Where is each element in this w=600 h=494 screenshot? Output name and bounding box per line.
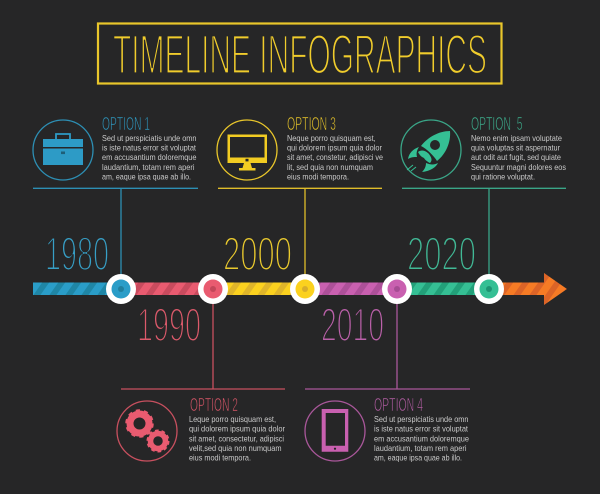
year 1990: 1990: [137, 298, 201, 351]
node 1990: [198, 274, 228, 304]
year 2020: 2020: [407, 227, 476, 280]
option 5 text: OPTION 5: [471, 113, 522, 134]
option 4 text: am, eaque ipsa quae ab illo.: [374, 453, 462, 463]
option 5 text: quia voluptas sit aspernatur: [471, 143, 560, 153]
year 2000: 2000: [223, 227, 292, 280]
option 3 text: eius modi tempora.: [287, 171, 349, 181]
node 2000: [290, 274, 320, 304]
icon: tablet: [305, 401, 365, 461]
year 2010: 2010: [321, 298, 384, 351]
option 3 text: lit, sed quia non numquam: [287, 162, 373, 172]
option 4 text: em accusantium doloremque: [374, 433, 469, 443]
option 1 text: is iste natus error sit voluptat: [102, 143, 197, 153]
option 2 text: sit amet, consectetur, adipisci: [189, 433, 284, 443]
option 2 text: qui dolorem ipsum quia dolor: [189, 424, 285, 434]
icon: rocket: [401, 120, 461, 180]
node 2020: [474, 274, 504, 304]
option 5 text: aut odit aut fugit, sed quiate: [471, 152, 561, 162]
option 1 text: OPTION 1: [102, 113, 150, 134]
option 2 text: OPTION 2: [190, 394, 238, 415]
option 4 text: Sed ut perspiciatis unde omn: [374, 414, 469, 424]
option 2 text: Leque porro quisquam est,: [189, 414, 276, 424]
option 5 text: [471, 113, 566, 181]
option 3 text: qui dolorem ipsum quia dolor: [287, 143, 382, 153]
option 4 text: OPTION 4: [374, 394, 423, 415]
option 3 text: OPTION 3: [287, 113, 336, 134]
icon: briefcase: [33, 120, 93, 180]
option 3 text: sit amet, constetur, adipisci ve: [287, 152, 383, 162]
option 1 text: am, eaque ipsa quae ab illo.: [102, 171, 191, 181]
option 4 text: [374, 394, 469, 463]
option 3 text: [287, 113, 383, 181]
option 5 text: Sequuntur magni dolores eos: [471, 162, 566, 172]
icon: monitor: [217, 120, 277, 180]
icon: gears: [117, 401, 177, 461]
option 2 text: eius modi tempora.: [189, 453, 251, 463]
option 1 text: Sed ut perspiciatis unde omn: [102, 133, 197, 143]
option 4 text: laudantium, totam rem aperi: [374, 443, 467, 453]
option 5 text: qui ratione voluptat.: [471, 171, 535, 181]
option 4 text: is iste natus error sit voluptat: [374, 424, 469, 434]
option 5 text: Nemo enim ipsam voluptate: [471, 133, 562, 143]
option 1 text: [102, 113, 197, 181]
timeline bar: [33, 273, 567, 305]
option 1 text: laudantium, totam rem aperi: [102, 162, 195, 172]
option 3 text: Neque porro quisquam est,: [287, 133, 376, 143]
option 2 text: [189, 394, 285, 463]
option 1 text: em accusantium doloremque: [102, 152, 197, 162]
option 2 text: velit,sed quia non numquam: [189, 443, 282, 453]
node 2010: [382, 274, 412, 304]
node 1980: [106, 274, 136, 304]
year 1980: 1980: [45, 227, 109, 280]
stem lines: [33, 188, 566, 389]
